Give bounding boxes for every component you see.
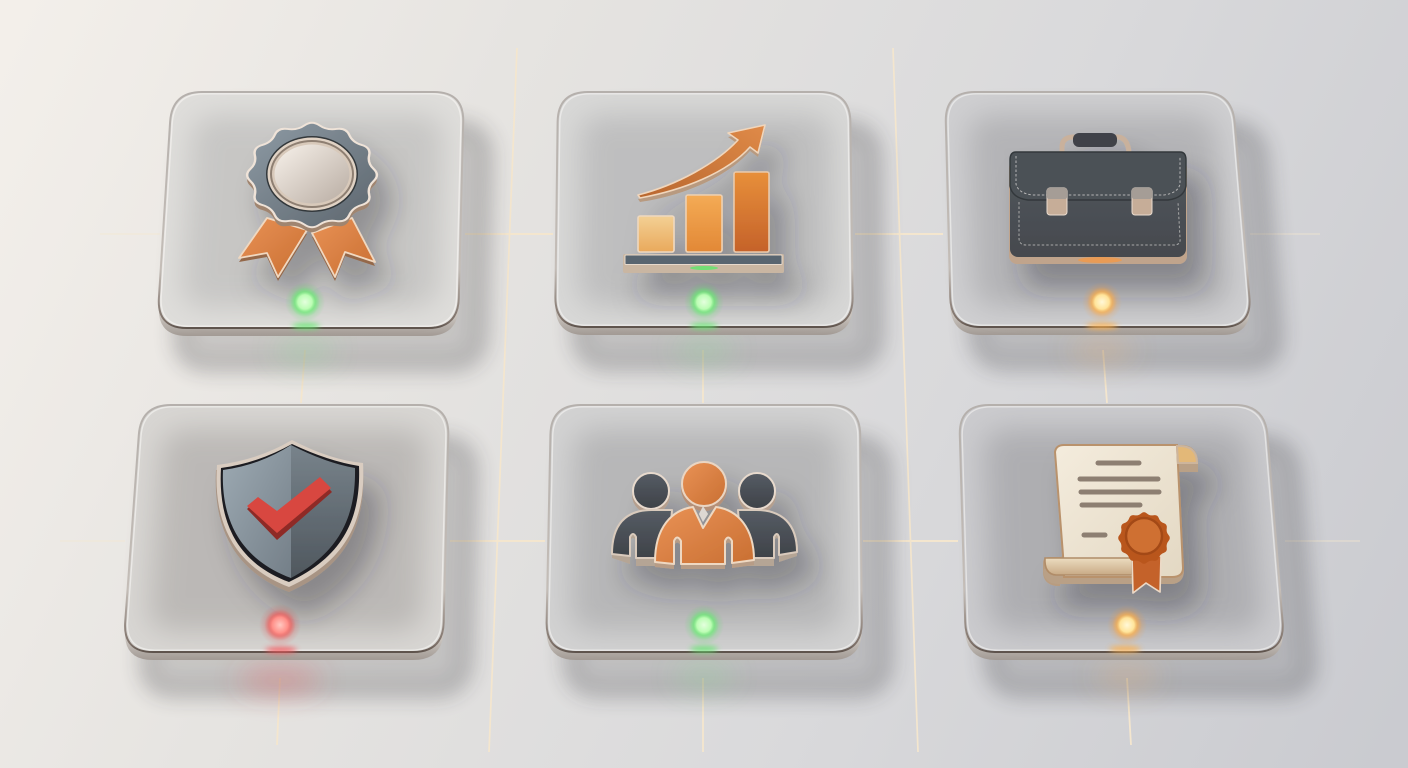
panel shadows	[147, 128, 1309, 690]
status light: red	[259, 604, 301, 672]
panel: certificate tile	[960, 405, 1283, 671]
panel: team tile	[547, 405, 862, 671]
panel: medal tile	[159, 92, 463, 348]
status light: amber	[1082, 282, 1122, 348]
icon: shield with check mark	[216, 440, 363, 592]
icon: award medal rosette	[239, 123, 377, 281]
icon: certificate scroll with wax seal	[1043, 445, 1198, 593]
icon: rising bar chart with arrow	[623, 125, 784, 273]
status light: green	[285, 282, 325, 348]
icon: team of three people	[612, 462, 797, 569]
panel: briefcase tile	[946, 92, 1250, 348]
status light: green	[684, 605, 724, 671]
icon: briefcase	[1009, 133, 1187, 264]
panel: growth chart tile	[555, 92, 853, 348]
panel: shield tile	[125, 405, 448, 672]
status light: amber	[1107, 605, 1147, 671]
status light: green	[684, 282, 724, 348]
coloured light spill under tiles	[240, 340, 1157, 692]
